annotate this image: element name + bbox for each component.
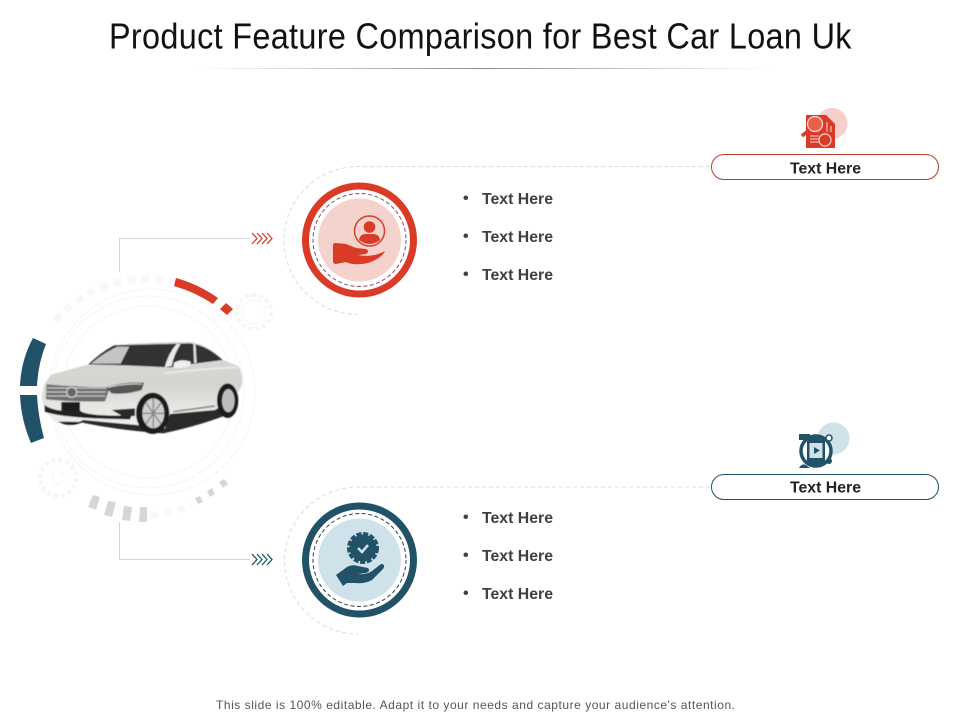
- red gauge arc: [174, 278, 233, 315]
- title underline: [195, 68, 770, 69]
- list: bottom: [463, 509, 553, 603]
- connector: top: [120, 238, 250, 272]
- icon: rosette with check above hand: [336, 534, 384, 586]
- list: top: •: [463, 190, 469, 207]
- badge: blue rosette in hand: [306, 506, 414, 614]
- dashed path: top: [284, 166, 710, 314]
- pill: bottom: [712, 474, 938, 500]
- arrow chevrons: red: [252, 233, 272, 244]
- dashed path: bottom: [285, 487, 710, 634]
- list: bottom: Text Here: [482, 548, 553, 565]
- car: [41, 342, 242, 434]
- list: bottom: •: [463, 509, 469, 526]
- list: bottom: Text Here: [482, 586, 553, 603]
- badge: red person in hand: [306, 186, 414, 294]
- faint tick marks: [55, 279, 192, 515]
- connector: bottom: [120, 522, 250, 560]
- list: top: Text Here: [482, 191, 553, 208]
- list: top: [463, 190, 553, 284]
- list: bottom: •: [463, 585, 469, 602]
- footer note: This slide is 100% editable. Adapt it to your needs and capture your audience's attention.: [216, 698, 735, 712]
- faint gear top right: [237, 295, 271, 329]
- icon: red document with magnifier: [802, 108, 848, 148]
- arrow chevrons: blue: [252, 554, 272, 565]
- list: bottom: •: [463, 547, 469, 564]
- icon: person in circle above hand: [333, 216, 385, 264]
- faint gear bottom left: [40, 460, 76, 496]
- pill: top: Text Here: [790, 160, 861, 178]
- title: Product Feature Comparison for Best Car Loan Uk: [109, 17, 852, 57]
- pill: top: [712, 154, 938, 180]
- list: top: Text Here: [482, 267, 553, 284]
- list: top: Text Here: [482, 229, 553, 246]
- central car gauge: [20, 278, 271, 522]
- faint gauge rings: [49, 289, 255, 495]
- blue gauge arc: [20, 338, 46, 443]
- list: bottom: Text Here: [482, 510, 553, 527]
- grey gauge ticks: [88, 479, 228, 522]
- list: top: •: [463, 228, 469, 245]
- list: top: •: [463, 266, 469, 283]
- icon: blue phone with play: [799, 422, 850, 468]
- pill: bottom: Text Here: [790, 480, 861, 496]
